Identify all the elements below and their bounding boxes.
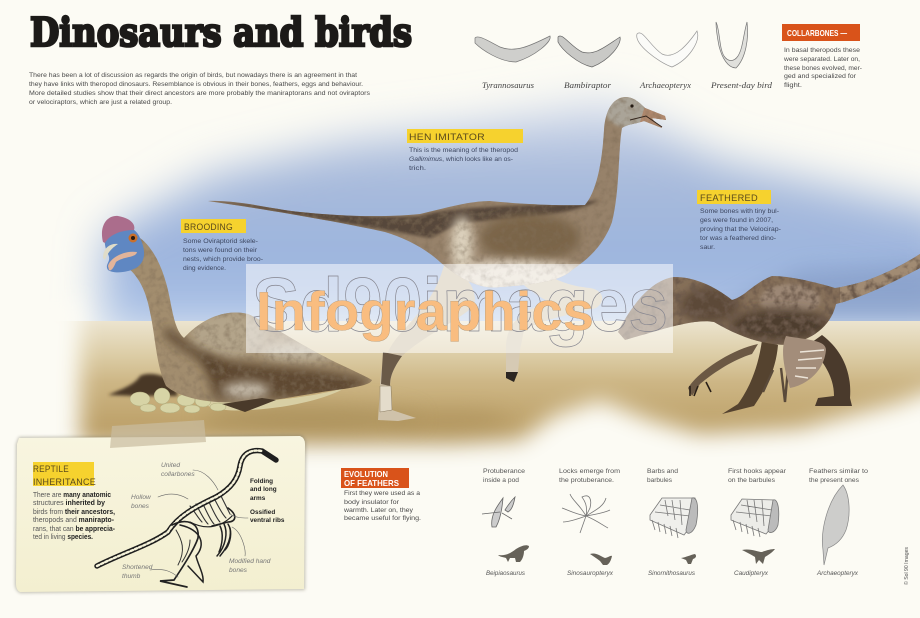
- card body text: structures inherited by: [33, 500, 105, 507]
- feather stage 4: Caudipteryx: First hooks appear: [728, 468, 787, 475]
- nest and eggs: [108, 374, 345, 413]
- copyright credit: © Sol 90 Images: [903, 547, 910, 585]
- callout: feathered: proving that the Velocirap-: [700, 226, 781, 233]
- icon: Beipiaosaurus silhouette: [498, 545, 529, 562]
- callout: collarbones: ged and specialized for: [784, 73, 857, 80]
- skeleton: spine, tail and neck: [97, 451, 276, 566]
- callout: brooding: ding evidence.: [183, 265, 226, 272]
- callout: feathered: Some bones with tiny bul-: [700, 208, 779, 215]
- callout: evolution of feathers: became useful for flying.: [344, 515, 421, 522]
- intro text block: There has been a lot of discussion as regards the origin of birds, but nowadays there is an agreement in that: [29, 72, 357, 79]
- heading: reptile inheritance: INHERITANCE: [33, 477, 96, 488]
- card body text: birds from their ancestors,: [33, 509, 115, 516]
- callout: collarbones: [782, 24, 862, 89]
- skeleton labels: bones: [131, 503, 150, 510]
- callout: feathered: ges were found in 2007,: [700, 217, 773, 224]
- skeleton labels: arms: [250, 495, 266, 502]
- skeleton labels: collarbones: [161, 471, 195, 478]
- body and neck: [130, 238, 372, 402]
- feather stage 5: Archaeopteryx: the present ones: [809, 477, 860, 484]
- callout: evolution of feathers: warmth. Later on, they: [343, 507, 414, 514]
- icon: Tyrannosaurus collarbone: [475, 36, 550, 62]
- illustration: Oviraptorid brooding on its nest: [102, 216, 380, 413]
- callout: brooding: Some Oviraptorid skele-: [183, 238, 258, 245]
- body, neck, head and tail: [208, 97, 666, 288]
- callout: evolution of feathers: [341, 468, 421, 522]
- watermark: Infographics: Infographics: [256, 280, 594, 342]
- skeleton labels: United: [161, 462, 180, 469]
- callout: hen imitator: This is the meaning of the theropod: [409, 147, 518, 154]
- collarbone species labels: Archaeopteryx: [639, 80, 691, 90]
- callout: brooding: BROODING: [184, 222, 233, 233]
- callout: hen imitator: Gallimimus, which looks like an os-: [409, 156, 513, 163]
- intro text block: or velociraptors, which are just a related group.: [29, 99, 172, 106]
- arm with claws: [688, 344, 758, 396]
- callout: feathered: saur.: [700, 244, 715, 251]
- collarbone comparison: [475, 22, 773, 90]
- tape: [110, 420, 206, 448]
- feathered wing: [783, 336, 826, 388]
- callout: collarbones: were separated. Later on,: [783, 56, 860, 63]
- skeleton: label leader lines: [150, 470, 248, 577]
- skeleton labels: thumb: [122, 573, 141, 580]
- title: Dinosaurs and birds: [30, 10, 412, 56]
- icon: pod feather: [482, 497, 515, 527]
- heading: reptile inheritance: [33, 462, 96, 488]
- skeleton: arm and hand: [212, 508, 235, 526]
- skeleton labels: bones: [229, 567, 248, 574]
- illustration: feathered Velociraptor: [610, 250, 920, 414]
- callout: brooding: tons were found on their: [183, 247, 258, 254]
- illustration: Gallimimus hen imitator: [200, 90, 680, 421]
- skeleton diagram: [97, 451, 276, 587]
- skeleton labels: ventral ribs: [250, 517, 285, 524]
- callout: feathered: FEATHERED: [700, 193, 758, 204]
- icon: feather locks: [562, 494, 610, 533]
- feather stage 2: Sinosauropteryx: Locks emerge from: [559, 468, 620, 475]
- watermark: Sd90images: Sd90images: [252, 263, 668, 348]
- feather stage 1: Beipiaosaurus: Beipiaosaurus: [486, 570, 525, 577]
- far leg: [506, 268, 602, 372]
- callout: evolution of feathers: OF FEATHERS: [344, 478, 399, 488]
- feather stage 4: Caudipteryx: Caudipteryx: [734, 570, 769, 577]
- icon: Caudipteryx silhouette: [742, 549, 775, 564]
- feather stage 3: Sinornithosaurus: barbules: [647, 477, 673, 484]
- skeleton labels: Ossified: [250, 509, 275, 516]
- skeleton labels: Shortened: [122, 564, 153, 571]
- callout: brooding: nests, which provide broo-: [183, 256, 263, 263]
- callout: hen imitator: trich.: [409, 165, 426, 172]
- collarbone species labels: Bambiraptor: [564, 80, 612, 90]
- icon: present-day bird collarbone: [716, 22, 748, 68]
- skeleton labels: Folding: [250, 478, 273, 485]
- callout: evolution of feathers: body insulator for: [344, 499, 400, 506]
- callout: evolution of feathers: First they were used as a: [344, 490, 420, 497]
- intro text block: More detailed studies show that their direct ancestors are more probably the maniraptorans and not oviraptors: [29, 90, 371, 97]
- feather stage 2: Sinosauropteryx: Sinosauropteryx: [567, 570, 614, 577]
- near leg: [378, 262, 475, 421]
- intro text block: [29, 72, 371, 106]
- collarbone species labels: [482, 80, 773, 90]
- watermark panel: [246, 263, 673, 353]
- callout: brooding: [181, 219, 263, 272]
- beak: [103, 244, 118, 260]
- front leg: [722, 340, 778, 414]
- skeleton: hip and legs: [160, 522, 198, 587]
- icon: Sinornithosaurus silhouette: [681, 554, 696, 564]
- icon: barbs and barbules: [650, 498, 698, 538]
- illustration: sky and desert landscape: [0, 100, 920, 540]
- card body text: rans, that can be apprecia-: [33, 526, 116, 533]
- skeleton labels: [122, 462, 285, 580]
- heading: reptile inheritance: REPTILE: [33, 464, 69, 475]
- collarbone species labels: Tyrannosaurus: [482, 80, 535, 90]
- callout: hen imitator: HEN IMITATOR: [409, 132, 485, 143]
- icon: modern feather: [822, 485, 849, 565]
- feather stage 1: Beipiaosaurus: Protuberance: [483, 468, 525, 475]
- hanging feathers: [763, 368, 788, 402]
- feather stage 4: Caudipteryx: [728, 468, 787, 577]
- callout: feathered: tor was a feathered dino-: [700, 235, 776, 242]
- card body text: theropods and maniraptо-: [33, 517, 115, 524]
- feather stage 3: Sinornithosaurus: [647, 468, 698, 577]
- feather stage 2: Sinosauropteryx: the protuberance.: [559, 477, 614, 484]
- feather stage 1: Beipiaosaurus: [482, 468, 529, 577]
- rear leg: [808, 335, 852, 406]
- feather stage 3: Sinornithosaurus: Sinornithosaurus: [648, 570, 695, 577]
- callout: hen imitator: [407, 129, 523, 172]
- card body text: There are many anatomic: [33, 492, 111, 499]
- callout: evolution of feathers: EVOLUTION: [344, 469, 388, 479]
- skeleton labels: and long: [250, 486, 277, 493]
- feather stage 5: Archaeopteryx: Archaeopteryx: [816, 570, 859, 577]
- feather stage 1: Beipiaosaurus: inside a pod: [483, 477, 519, 484]
- feather stage 3: Sinornithosaurus: Barbs and: [647, 468, 678, 475]
- callout: collarbones: COLLARBONES —: [787, 28, 847, 38]
- callout: collarbones: these bones evolved, mer-: [784, 65, 862, 72]
- callout: feathered: [697, 190, 781, 251]
- card body text: ted in living species.: [33, 534, 93, 541]
- callout: collarbones: In basal theropods these: [784, 47, 860, 54]
- icon: Archaeopteryx collarbone: [637, 31, 698, 67]
- feather stage 5: Archaeopteryx: Feathers similar to: [809, 468, 868, 475]
- collarbone species labels: Present-day bird: [710, 80, 773, 90]
- skeleton: ribs: [190, 494, 230, 524]
- skeleton labels: Modified hand: [229, 558, 271, 565]
- icon: Bambiraptor collarbone: [558, 36, 620, 67]
- callout: collarbones: flight.: [784, 82, 802, 89]
- panel: reptile inheritance card: [15, 420, 306, 593]
- feather stage 2: Sinosauropteryx: [559, 468, 620, 577]
- intro text block: they have links with theropod dinosaurs. Resemblance is obvious in their bones, feathers, eggs and behaviour.: [29, 81, 363, 88]
- head: [105, 226, 144, 272]
- card body text: [33, 492, 116, 541]
- body, neck, head and tail: [618, 254, 920, 345]
- feather stage 5: Archaeopteryx: [809, 468, 868, 577]
- skeleton labels: Hollow: [131, 494, 152, 501]
- feather stage 4: Caudipteryx: on the barbules: [728, 477, 776, 484]
- icon: Sinosauropteryx silhouette: [590, 553, 612, 565]
- icon: hooked barbules: [731, 499, 779, 537]
- crest: [102, 216, 134, 243]
